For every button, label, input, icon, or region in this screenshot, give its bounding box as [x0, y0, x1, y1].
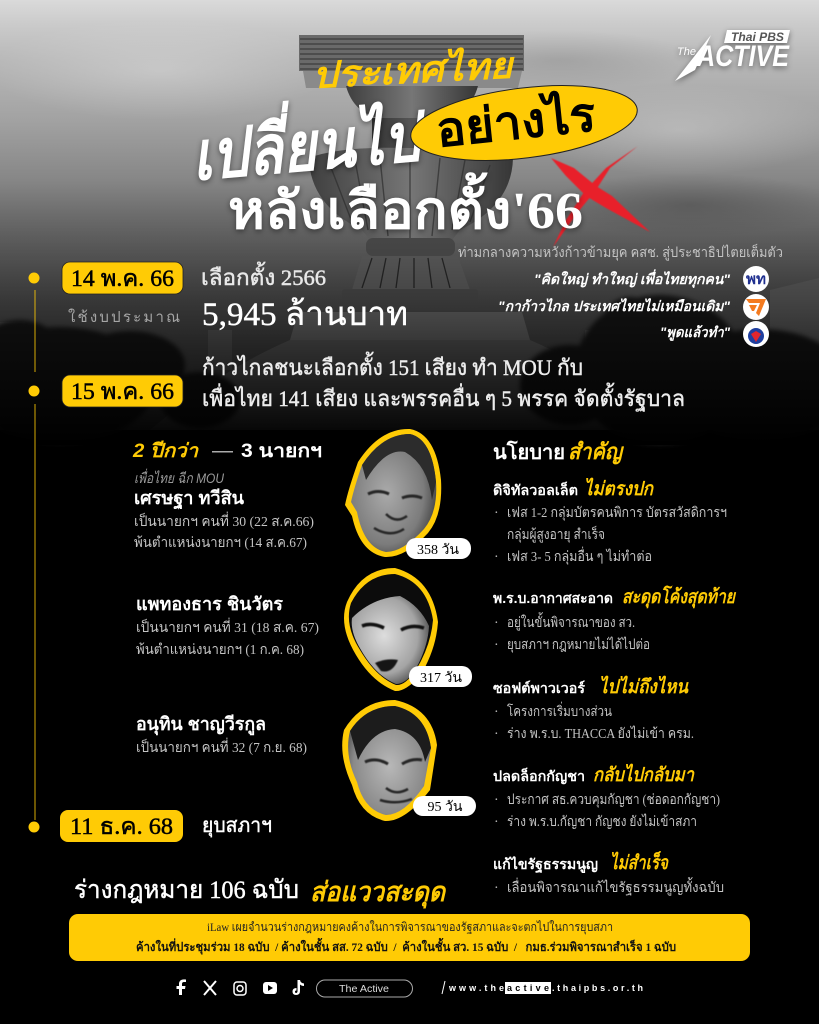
title badge: อย่างไร: [407, 74, 641, 172]
callout: iLaw pending bills: [69, 914, 750, 961]
icon: X: [204, 981, 216, 995]
label: 358 days: 358 วัน: [417, 543, 459, 558]
website url: www.the: [448, 983, 504, 993]
prime minister 1 text: เป็นนายกฯ คนที่ 30 (22 ส.ค.66): [134, 512, 314, 530]
icon: tiktok: [292, 980, 304, 995]
policy: clean air act: อยู่ในขั้นพิจารณาของ สว.: [507, 612, 635, 631]
prime minister 2 text: [136, 594, 319, 658]
prime minister 1 text: พ้นตำแหน่งนายกฯ (14 ส.ค.67): [134, 535, 307, 551]
heading: 2 years 3 prime ministers: [132, 440, 322, 462]
policy: clean air act: [493, 585, 737, 653]
icon: red X: [551, 146, 650, 247]
election budget: [68, 297, 408, 333]
icon: Bhumjaithai logo: [743, 321, 769, 347]
website url: .thaipbs.or.th: [552, 983, 643, 993]
policy: constitution: แก้ไขรัฐธรรมนูญ: [493, 855, 598, 874]
prime minister 1 text: เศรษฐา ทวีสิน: [134, 488, 245, 510]
title: เปลี่ยนไป: เปลี่ยนไป: [188, 89, 431, 195]
date badge: 14 พ.ค. 66: 14 พ.ค. 66: [71, 266, 174, 291]
prime minister 3 text: อนุทิน ชาญวีรกูล: [136, 714, 266, 736]
timeline line: [28, 272, 40, 832]
portrait: Anutin: [342, 700, 476, 821]
prime minister 1 text: เพื่อไทย ฉีก MOU: [134, 468, 225, 486]
policy: soft power: ไปไม่ถึงไหน: [599, 675, 689, 698]
icon: youtube: [263, 982, 277, 994]
policy: digital wallet: เฟส 1-2 กลุ่มบัตรคนพิการ บัตรสวัสดิการฯ: [507, 506, 727, 521]
heading: key policies: นโยบาย: [493, 440, 565, 464]
icon: facebook: [176, 979, 186, 995]
event: dissolution: ยุบสภาฯ: [202, 815, 272, 838]
prime minister 2 text: เป็นนายกฯ คนที่ 31 (18 ส.ค. 67): [136, 618, 319, 636]
policy: digital wallet: ไม่ตรงปก: [584, 477, 654, 500]
party slogans and logos: "กาก้าวไกล ประเทศไทยไม่เหมือนเดิม": [498, 298, 730, 314]
election budget: ใช้งบประมาณ: [68, 308, 180, 326]
event: coalition text: เพื่อไทย 141 เสียง และพรรคอื่น ๆ 5 พรรค จัดตั้งรัฐบาล: [202, 383, 685, 412]
policy: soft power: [493, 675, 694, 742]
policy: cannabis: [493, 763, 720, 830]
policy: cannabis: ประกาศ สธ.ควบคุมกัญชา (ช่อดอกกัญชา): [507, 793, 720, 808]
date badge: 11 ธ.ค. 68: 11 ธ.ค. 68: [70, 814, 173, 839]
policy: digital wallet: ดิจิทัลวอลเล็ต: [493, 481, 578, 498]
date badge: 11 ธ.ค. 68: [60, 810, 183, 842]
policy: constitution: เลื่อนพิจารณาแก้ไขรัฐธรรมนูญทั้งฉบับ: [507, 877, 724, 896]
policy: soft power: ·: [494, 727, 499, 742]
logo: Thai PBS The Active: [675, 30, 790, 81]
label: 317 days: 317 วัน: [420, 671, 462, 686]
label: The Active pill: [316, 980, 412, 997]
icon: instagram: [234, 982, 246, 995]
heading: 106 bills at risk: ร่างกฎหมาย 106 ฉบับ: [74, 877, 299, 904]
policy: clean air act: ยุบสภาฯ กฎหมายไม่ได้ไปต่อ: [507, 636, 650, 653]
title: หลังเลือกตั้ง'66: หลังเลือกตั้ง'66: [228, 172, 583, 240]
policy: clean air act: พ.ร.บ.อากาศสะอาด: [493, 590, 613, 606]
title: ประเทศไทย: ประเทศไทย: [311, 44, 516, 96]
portrait: Paetongtarn: [344, 568, 472, 691]
label: The Active pill: The Active: [339, 983, 389, 995]
policy: cannabis: ·: [494, 815, 499, 830]
logo: Thai PBS The Active: The: [677, 46, 696, 58]
prime minister 3 text: เป็นนายกฯ คนที่ 32 (7 ก.ย. 68): [136, 738, 307, 756]
policy: soft power: ·: [494, 705, 499, 720]
party slogans and logos: "พูดแล้วทำ": [660, 324, 730, 341]
party slogans and logos: "คิดใหญ่ ทำใหญ่ เพื่อไทยทุกคน": [534, 269, 730, 288]
policy: digital wallet: เฟส 3- 5 กลุ่มอื่น ๆ ไม่ทำต่อ: [507, 547, 652, 565]
title badge: อย่างไร: อย่างไร: [433, 85, 598, 158]
subtitle: ท่ามกลางความหวังก้าวข้ามยุค คสช. สู่ประชาธิปไตยเต็มตัว: [458, 243, 783, 261]
portrait: Srettha: [345, 429, 471, 559]
prime minister 2 text: แพทองธาร ชินวัตร: [136, 594, 283, 614]
heading: 106 bills at risk: [74, 877, 446, 909]
heading: 2 years 3 prime ministers: 3 นายกฯ: [241, 441, 322, 462]
prime minister 2 text: พ้นตำแหน่งนายกฯ (1 ก.ค. 68): [136, 642, 304, 658]
policy: cannabis: ·: [494, 793, 499, 808]
icon: Pheu Thai logo: พท: [746, 271, 766, 288]
label: 95 days: 95 วัน: [428, 800, 463, 815]
policy: cannabis: ปลดล็อกกัญชา: [493, 767, 585, 785]
social icons: [176, 979, 412, 997]
election budget: 5,945 ล้านบาท: [202, 297, 408, 333]
event: coalition text: ก้าวไกลชนะเลือกตั้ง 151 เสียง ทำ MOU กับ: [202, 352, 583, 380]
date badge: 15 พ.ค. 66: 15 พ.ค. 66: [71, 379, 174, 404]
date badge: 15 พ.ค. 66: [62, 375, 183, 407]
prime minister 3 text: [136, 714, 307, 756]
event: election 2566: เลือกตั้ง 2566: [201, 262, 326, 290]
policy: digital wallet: [493, 477, 727, 565]
heading: 2 years 3 prime ministers: 2 ปีกว่า: [132, 440, 199, 462]
policy: cannabis: กลับไปกลับมา: [593, 763, 695, 786]
prime minister 1 text: [134, 468, 314, 551]
policy: soft power: ร่าง พ.ร.บ. THACCA ยังไม่เข้า ครม.: [507, 725, 694, 742]
heading: 106 bills at risk: ส่อแววสะดุด: [310, 877, 446, 909]
policy: clean air act: ·: [494, 616, 499, 631]
logo: Thai PBS The Active: Thai PBS: [731, 30, 784, 44]
date badge: 14 พ.ค. 66: [62, 262, 183, 294]
heading: key policies: สำคัญ: [568, 439, 625, 465]
icon: Pheu Thai logo: [743, 266, 769, 292]
callout: iLaw pending bills: iLaw เผยจำนวนร่างกฎหมายคงค้างในการพิจารณาของรัฐสภาและจะตกไปในการยุบสภา: [207, 920, 613, 935]
heading: key policies: [493, 439, 625, 465]
policy: digital wallet: ·: [494, 506, 499, 521]
icon: Move Forward logo: [743, 294, 769, 320]
policy: soft power: โครงการเริ่มบางส่วน: [507, 702, 612, 720]
policy: clean air act: ·: [494, 638, 499, 653]
logo: Thai PBS The Active: ACTIVE: [696, 40, 790, 73]
party slogans and logos: [498, 266, 769, 347]
website url: [442, 981, 643, 994]
policy: constitution: [493, 851, 724, 896]
policy: constitution: ·: [494, 881, 499, 896]
callout: iLaw pending bills: ค้างในที่ประชุมร่วม 18 ฉบับ / ค้างในชั้น สส. 72 ฉบับ / ค้างในชั้น สว. 15 ฉบับ / กมธ.ร่วมพิจารณาสำเร็จ 1 ฉบับ: [136, 937, 676, 955]
policy: soft power: ซอฟต์พาวเวอร์: [493, 680, 585, 696]
policy: cannabis: ร่าง พ.ร.บ.กัญชา กัญชง ยังไม่เข้าสภา: [507, 813, 697, 830]
policy: constitution: ไม่สำเร็จ: [610, 851, 669, 874]
event: coalition text: [202, 352, 685, 412]
policy: clean air act: สะดุดโค้งสุดท้าย: [622, 585, 737, 609]
website url: active: [507, 983, 549, 993]
policy: digital wallet: กลุ่มผู้สูงอายุ สำเร็จ: [507, 525, 605, 543]
policy: digital wallet: ·: [494, 550, 499, 565]
